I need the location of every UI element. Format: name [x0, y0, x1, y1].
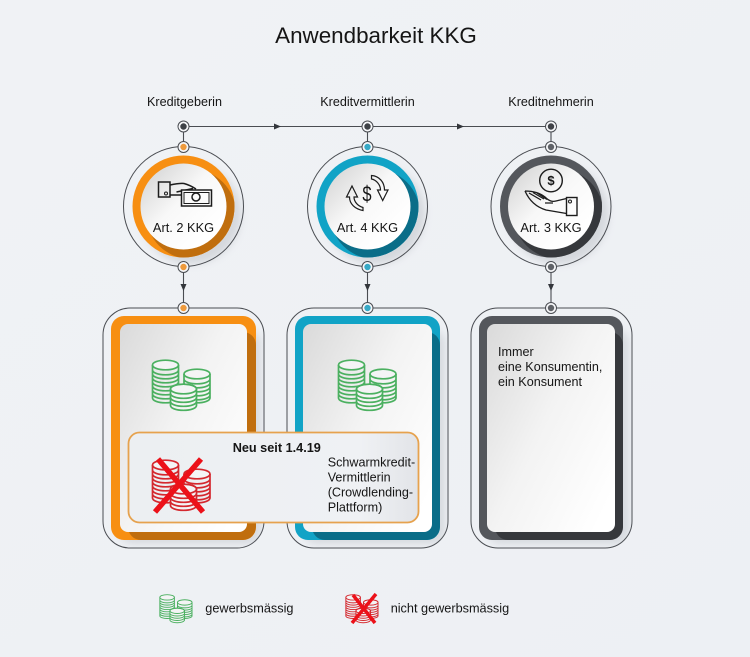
callout heading: Neu seit 1.4.19	[233, 441, 321, 455]
legend: gewerbsmässig: gewerbsmässig	[205, 602, 293, 616]
callout text: Plattform)	[328, 501, 382, 515]
text: Immer eine Konsumentin, ein Konsument: Immer	[498, 345, 534, 359]
column heading: Kreditvermittlerin: Kreditvermittlerin	[320, 95, 415, 109]
text: Immer eine Konsumentin, ein Konsument: eine Konsumentin,	[498, 360, 602, 374]
label: Art. 3 KKG: Art. 3 KKG	[520, 220, 582, 235]
nodes: column 1	[178, 121, 189, 314]
text: Immer eine Konsumentin, ein Konsument: ein Konsument	[498, 375, 583, 389]
panel: card Kreditvermittlerin	[287, 308, 448, 548]
legend: gewerbsmässig	[160, 595, 293, 623]
icon: green coins	[152, 360, 210, 410]
panel: card Kreditnehmerin	[471, 308, 632, 548]
title: Anwendbarkeit KKG	[275, 23, 477, 48]
arrow: flow connector across the top	[184, 124, 551, 130]
icon: dollar with exchange arrows: $	[362, 182, 372, 207]
callout text: (Crowdlending-	[328, 486, 413, 500]
icon: hand paying money	[158, 182, 212, 206]
panel: circle Art. 2 KKG	[124, 146, 244, 266]
column heading: Kreditnehmerin: Kreditnehmerin	[508, 95, 594, 109]
arrow: connector from circles to cards, column 2	[364, 126, 370, 308]
icon: red coins crossed out	[152, 459, 210, 512]
panel: circle Art. 4 KKG	[308, 146, 428, 266]
label: Art. 4 KKG: Art. 4 KKG	[337, 220, 398, 235]
callout: Neu seit 1.4.19	[128, 432, 419, 522]
nodes: column 2	[362, 121, 373, 314]
panel: card Kreditgeberin	[103, 308, 264, 548]
icon: hand holding a coin: $	[547, 173, 555, 188]
arrow: connector from circles to cards, column 3	[548, 126, 554, 308]
nodes: column 3	[546, 121, 556, 314]
column heading: Kreditgeberin: Kreditgeberin	[147, 95, 222, 109]
label: Art. 2 KKG: Art. 2 KKG	[153, 220, 214, 235]
legend: nicht gewerbsmässig: nicht gewerbsmässig	[391, 602, 509, 616]
arrow: connector from circles to cards, column 1	[180, 126, 186, 308]
icon: green coins	[338, 360, 396, 410]
legend: nicht gewerbsmässig	[346, 594, 509, 623]
panel: circle Art. 3 KKG	[491, 146, 611, 266]
callout text: Vermittlerin	[328, 471, 391, 485]
callout text: Schwarmkredit-	[328, 456, 415, 470]
